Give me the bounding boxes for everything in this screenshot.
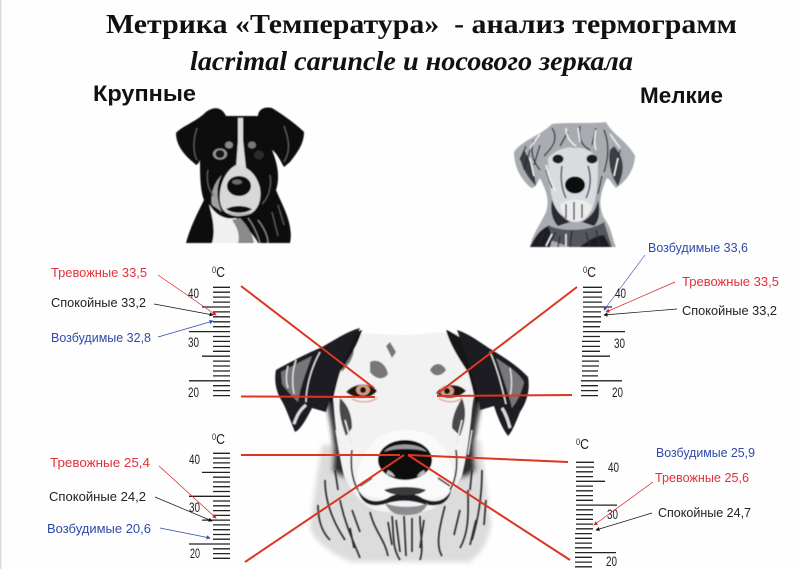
chin (385, 503, 428, 515)
forehead mottling (342, 342, 446, 378)
left ear (275, 328, 360, 432)
callouts: nose temperature, small dogs: Возбудимые 25,9 (656, 446, 755, 460)
thermometer scale: top left: 20 (188, 384, 199, 400)
title: Метрика «Температура» - анализ термограмм (106, 9, 737, 39)
callouts: eye temperature, small dogs (604, 241, 779, 318)
icon: small dog portrait (514, 122, 635, 247)
nose (378, 440, 432, 480)
dark fur strokes (520, 126, 620, 247)
callouts: nose temperature, large dogs: Спокойные 24,2 (49, 490, 146, 504)
mouth (357, 487, 452, 505)
neck (548, 222, 612, 247)
thermometer scale: top left (188, 264, 230, 400)
thermometer scale: top right: 40 (615, 285, 626, 301)
callouts: eye temperature, small dogs: Возбудимые 33,6 (648, 241, 748, 255)
fur strokes (194, 126, 288, 236)
thermometer scale: bottom right: 40 (608, 459, 619, 475)
light streaks (336, 420, 472, 455)
callouts: eye temperature, large dogs: Возбудимые 32,8 (51, 331, 151, 345)
thermometer scale: top left: 30 (188, 334, 199, 350)
left eye (346, 384, 377, 398)
callouts: eye temperature, large dogs: Тревожные 33,5 (51, 266, 147, 280)
thermometer scale: bottom right: C (580, 436, 589, 453)
thermometer scale: bottom left: 40 (189, 451, 200, 467)
thermometer scale: top right: 30 (614, 335, 625, 351)
muzzle shading (351, 450, 457, 490)
callouts: eye temperature, small dogs: Тревожные 33,5 (682, 275, 779, 289)
thermometer scale: top right: C (587, 264, 596, 281)
thermometer scale: top left: 0 (212, 265, 216, 275)
beard (560, 200, 592, 222)
thermometer scale: top right: 0 (583, 265, 587, 275)
thermometer scale: top left: C (216, 264, 225, 281)
thermometer scale: bottom right: 30 (607, 506, 618, 522)
right eye (436, 385, 466, 398)
silhouette (176, 107, 304, 243)
head (333, 332, 474, 513)
thermometer scale: top right: 20 (612, 384, 623, 400)
red guide lines (241, 286, 577, 562)
callouts: eye temperature, small dogs: Спокойные 33,2 (682, 304, 777, 318)
nose and eyes (565, 176, 585, 194)
chest fur strokes (318, 470, 486, 560)
chest (209, 204, 258, 243)
subtitle: lacrimal caruncle и носового зеркала (190, 46, 633, 76)
right ear (457, 330, 529, 436)
light fur strokes (530, 128, 620, 246)
thermometer scale: bottom left: C (216, 431, 225, 448)
blaze (236, 118, 246, 168)
ear shading (520, 146, 623, 186)
muzzle (357, 430, 454, 500)
icon: central dog portrait (275, 328, 529, 562)
callouts: nose temperature, small dogs: Спокойные 24,7 (658, 506, 751, 520)
icon: large dog portrait (176, 107, 304, 243)
callouts: nose temperature, small dogs (594, 446, 755, 530)
nose and mouth (227, 176, 251, 196)
tonal base (310, 352, 491, 562)
callouts: nose temperature, small dogs: Тревожные 25,6 (655, 471, 749, 485)
thermometer scale: bottom left: 20 (190, 545, 200, 561)
thermometer scale: bottom right: 0 (576, 437, 580, 447)
silhouette (514, 122, 635, 247)
thermometer scale: bottom left: 30 (189, 499, 200, 515)
callouts: nose temperature, large dogs: Возбудимые 20,6 (47, 522, 151, 536)
heading: small dogs: Мелкие (640, 83, 723, 108)
thermometer scale: bottom left: 0 (212, 432, 216, 442)
callouts: nose temperature, large dogs (47, 456, 216, 538)
callouts: nose temperature, large dogs: Тревожные 25,4 (50, 456, 150, 470)
callouts: eye temperature, large dogs (51, 266, 216, 345)
thermometer scale: bottom right (575, 436, 619, 569)
muzzle (220, 165, 261, 216)
thermometer scale: top right (581, 264, 626, 400)
heading: large dogs: Крупные (93, 81, 196, 106)
thermometer scale: top left: 40 (188, 285, 199, 301)
face (548, 147, 598, 219)
callouts: eye temperature, large dogs: Спокойные 33,2 (51, 296, 146, 310)
thermometer scale: bottom right: 20 (606, 553, 617, 569)
thermometer scale: bottom left (189, 431, 230, 561)
eyes (213, 148, 227, 160)
